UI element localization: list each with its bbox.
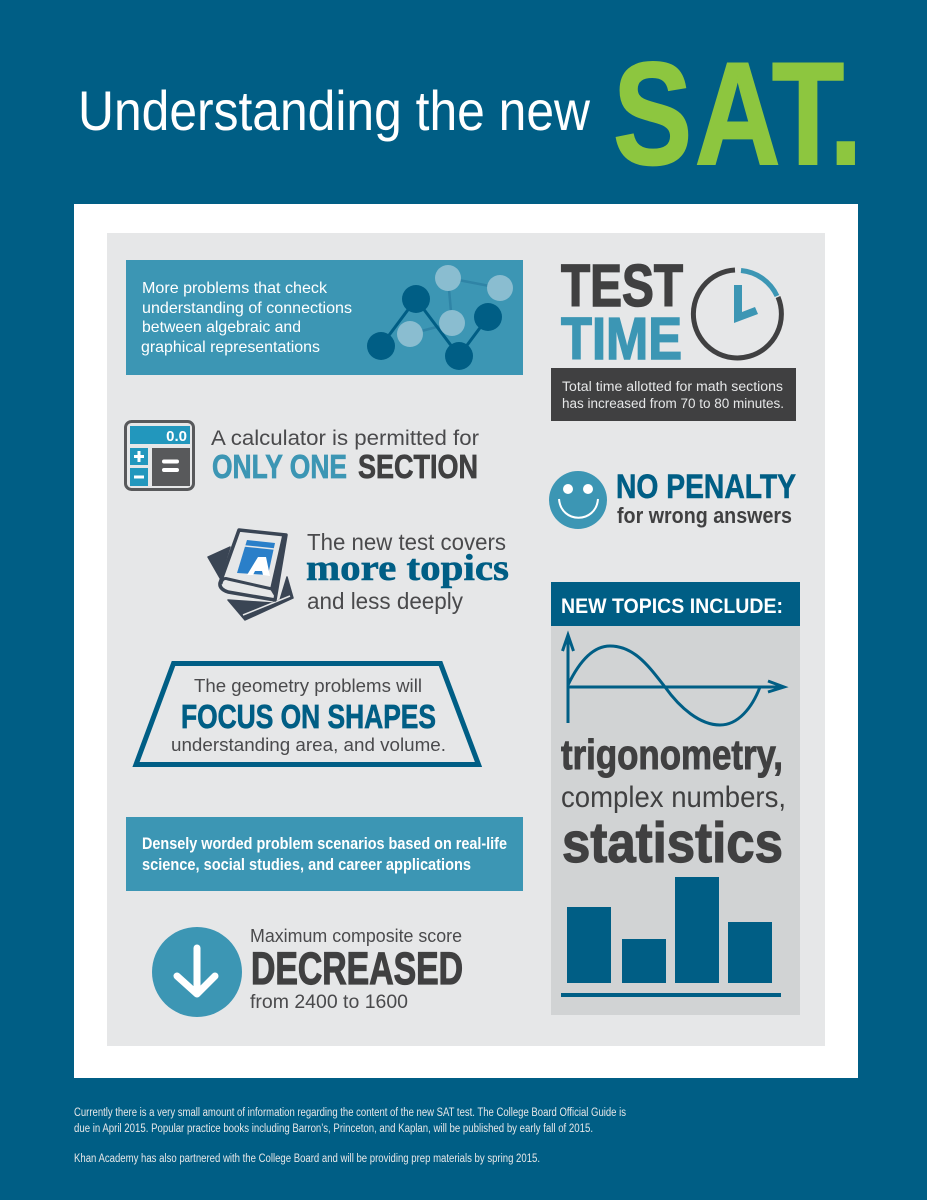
panel: gray background: [107, 233, 825, 1046]
no penalty note: for wrong answers: [617, 503, 792, 528]
new topics list: trigonometry,: [561, 731, 783, 778]
connections text: understanding of connections: [142, 300, 352, 317]
footer note: Khan Academy has also partnered with the College Board and will be providing prep materials by spring 2015.: [74, 1153, 540, 1165]
chart: sine wave: [562, 635, 784, 725]
footer note: due in April 2015. Popular practice books including Barron’s, Princeton, and Kaplan, will be published by early fall of 2015.: [74, 1123, 593, 1135]
test time heading and clock: TIME: [561, 306, 682, 372]
new topics heading: [551, 582, 800, 626]
geometry trapezoid callout: [136, 664, 478, 764]
geometry trapezoid callout: FOCUS ON SHAPES: [181, 698, 436, 735]
footer note: [74, 1107, 626, 1165]
icon: clock: [693, 270, 781, 358]
composite score note: [152, 925, 463, 1017]
test time heading and clock: TEST: [561, 253, 683, 319]
calculator note: [126, 422, 479, 490]
new topics list: [561, 731, 786, 875]
new topics list: statistics: [562, 811, 783, 875]
composite score note: DECREASED: [251, 943, 463, 994]
panel: densely worded callout: science, social studies, and career applications: [142, 856, 471, 874]
calculator note: ONLY ONE: [212, 448, 347, 485]
panel: densely worded callout: Densely worded problem scenarios based on real-life: [142, 835, 507, 853]
more topics note: and less deeply: [307, 588, 463, 614]
more topics note: more topics: [306, 548, 509, 589]
icon: smiley: [549, 471, 607, 529]
icon: down arrow: [152, 927, 242, 1017]
calculator note: SECTION: [358, 448, 478, 485]
footer note: Currently there is a very small amount of information regarding the content of the new SAT test. The College Board Official Guide is: [74, 1107, 626, 1119]
connections text: [141, 280, 352, 356]
no penalty note: [549, 468, 796, 529]
icon: calculator: 0.0: [166, 428, 187, 445]
new topics heading: NEW TOPICS INCLUDE:: [561, 595, 783, 618]
callout: total time: [551, 368, 796, 421]
calculator note: A calculator is permitted for: [211, 427, 479, 450]
more topics note: [208, 529, 509, 620]
title: Understanding the new: [78, 79, 590, 142]
composite score note: Maximum composite score: [250, 925, 462, 946]
callout: total time: has increased from 70 to 80 minutes.: [562, 396, 784, 411]
icon: network graph: [367, 265, 513, 370]
panel: densely worded callout: [126, 817, 523, 891]
icon: calculator: [126, 422, 194, 490]
panel: white frame: [74, 204, 858, 1078]
new topics list: complex numbers,: [561, 781, 786, 814]
connections text: More problems that check: [142, 280, 328, 297]
panel: connections callout: [126, 260, 523, 375]
no penalty note: NO PENALTY: [616, 468, 796, 506]
title: [78, 33, 862, 196]
chart: bars: [561, 877, 781, 997]
more topics note: The new test covers: [307, 529, 506, 555]
composite score note: from 2400 to 1600: [250, 992, 408, 1013]
panel: new topics: [551, 582, 800, 1015]
connections text: graphical representations: [141, 339, 320, 356]
test time heading and clock: [561, 253, 781, 372]
connections text: between algebraic and: [142, 319, 301, 336]
geometry trapezoid callout: understanding area, and volume.: [171, 734, 446, 755]
title: SAT.: [613, 33, 862, 196]
callout: total time: Total time allotted for math sections: [562, 379, 783, 394]
icon: books: [208, 530, 293, 620]
geometry trapezoid callout: The geometry problems will: [194, 675, 422, 696]
